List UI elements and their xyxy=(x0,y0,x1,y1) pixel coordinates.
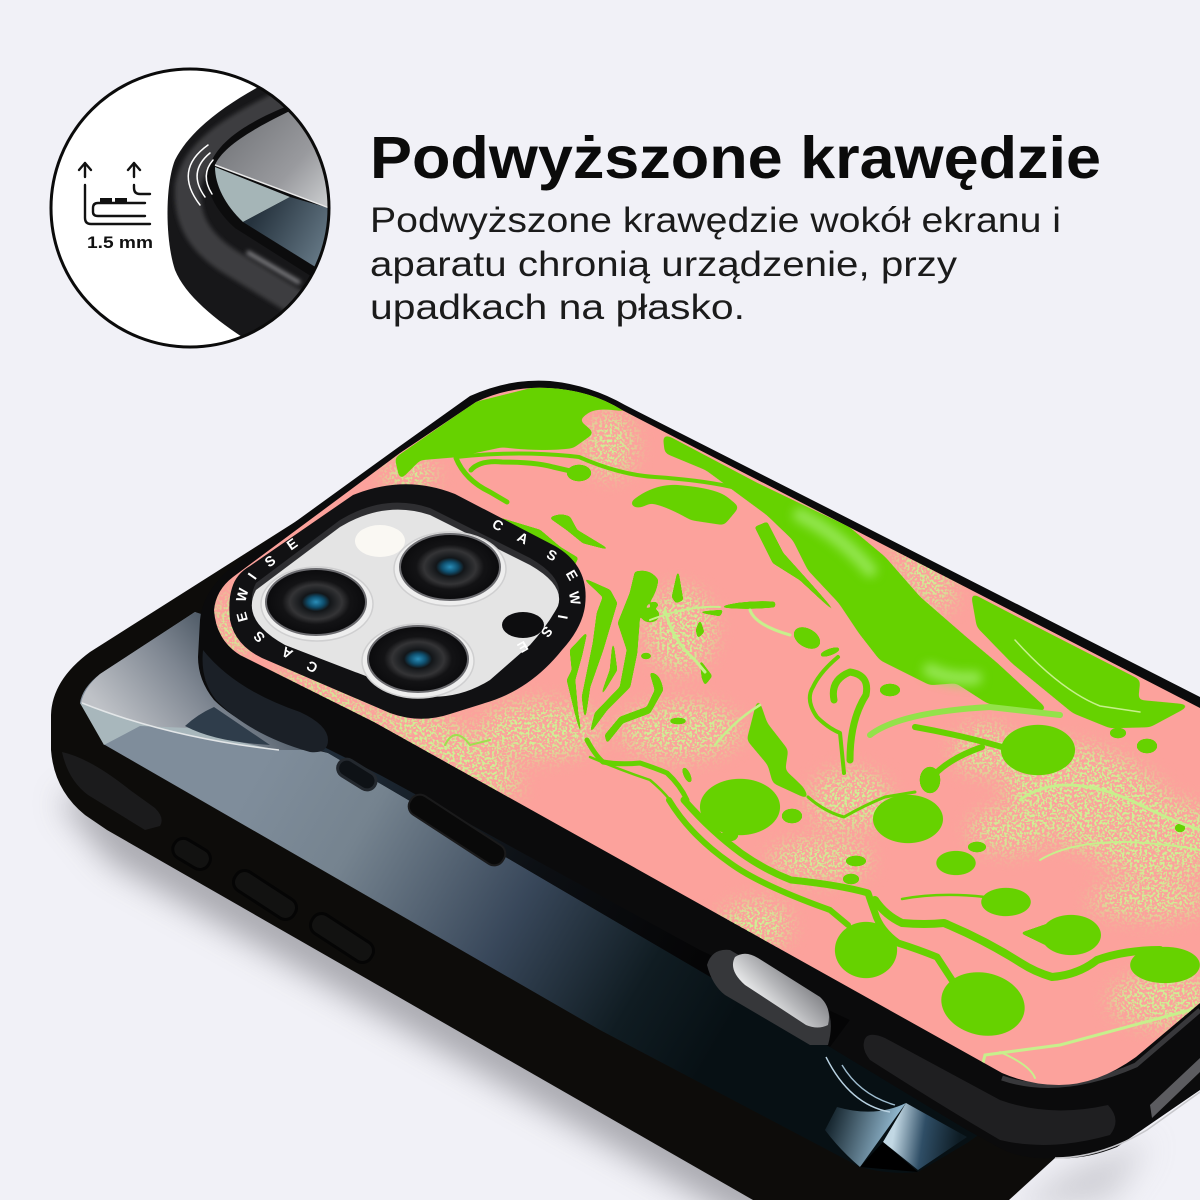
right pool xyxy=(971,593,1191,728)
inner bevel xyxy=(252,503,559,690)
inner sliver xyxy=(602,646,617,692)
pool highlights xyxy=(800,515,975,678)
top left pool xyxy=(395,384,640,480)
back phone lower corner screen glare xyxy=(825,1057,967,1172)
upper middle blob xyxy=(630,485,739,525)
pale green speckled areas xyxy=(213,413,1200,1026)
button: back action xyxy=(169,835,214,873)
green marble streams xyxy=(497,465,1185,947)
bumper frame xyxy=(51,470,1055,1200)
button: volume down xyxy=(307,910,377,966)
green marble large shapes xyxy=(395,384,1200,1043)
stripe near lettering xyxy=(502,518,578,564)
CASEWISE lettering: S xyxy=(250,628,268,646)
tall mid drop xyxy=(747,697,810,800)
case highlight edge xyxy=(1055,1092,1200,1158)
green thin streams xyxy=(456,454,1160,980)
upper left drop xyxy=(551,514,606,549)
diagonal stream xyxy=(756,522,832,608)
drops xyxy=(672,570,683,603)
corner bumper panel xyxy=(203,650,328,752)
camera ring xyxy=(229,484,586,719)
case on top phone xyxy=(198,381,1200,1158)
description text xyxy=(370,201,1061,327)
lens: bottom xyxy=(362,624,474,698)
case glossy rim xyxy=(1002,1010,1200,1086)
CASEWISE lettering xyxy=(233,516,584,676)
left outer stream xyxy=(582,578,617,720)
speaker grille xyxy=(1150,1058,1200,1118)
lidar xyxy=(502,612,544,638)
back phone with raised bumper xyxy=(51,470,1055,1200)
inner opening xyxy=(252,510,559,697)
inset impact arcs xyxy=(188,145,213,205)
CASEWISE lettering: W xyxy=(233,586,252,603)
title: Podwyższone krawędzie xyxy=(370,125,1101,191)
CASEWISE lettering: S xyxy=(544,546,560,564)
screen glass xyxy=(80,612,1000,1173)
CASEWISE lettering: E xyxy=(515,638,531,656)
CASEWISE lettering: C xyxy=(490,516,506,534)
lens: top right xyxy=(394,532,506,606)
blobs xyxy=(700,779,780,835)
phone drop shadow xyxy=(60,790,1000,1200)
camera island xyxy=(229,484,586,719)
marble print xyxy=(200,370,1200,1100)
CASEWISE lettering: I xyxy=(244,570,260,582)
CASEWISE lettering: A xyxy=(515,529,531,547)
CASEWISE lettering: A xyxy=(279,644,295,662)
inset case close-up xyxy=(168,88,328,336)
icon: camera blocks xyxy=(100,198,127,203)
lower screen light area xyxy=(80,703,279,750)
CASEWISE lettering: S xyxy=(262,552,278,570)
raised edge measurement: 1.5 mm xyxy=(87,234,153,252)
lower corner bumper panel xyxy=(864,1035,1116,1145)
flash xyxy=(355,525,405,557)
button: volume up xyxy=(230,867,300,923)
CASEWISE lettering: S xyxy=(538,623,556,641)
icon: raised edge diagram xyxy=(79,163,150,224)
case side wall xyxy=(205,680,850,1047)
CASEWISE lettering: E xyxy=(284,535,300,553)
lens: left xyxy=(261,567,373,641)
silent switch xyxy=(334,756,379,793)
description text: Podwyższone krawędzie wokół ekranu i xyxy=(370,201,1061,240)
long diagonal pool xyxy=(663,435,1048,712)
small leaf xyxy=(720,602,775,608)
side button xyxy=(405,791,509,869)
corner shadow xyxy=(1010,1140,1150,1200)
description text: upadkach na płasko. xyxy=(370,288,745,327)
lower wave stream xyxy=(605,673,663,743)
bumper corner sheen xyxy=(62,752,162,830)
pink base xyxy=(200,370,1200,1100)
screen dark notch xyxy=(185,707,270,745)
CASEWISE lettering: W xyxy=(566,590,584,607)
CASEWISE lettering: C xyxy=(304,658,320,676)
upper screen reflection xyxy=(81,612,330,750)
case body xyxy=(198,381,1200,1158)
description text: aparatu chronią urządzenie, przy xyxy=(370,245,958,284)
inset white disc xyxy=(51,69,329,347)
left tall stream xyxy=(590,571,658,733)
circular detail inset xyxy=(50,68,330,348)
far left stream xyxy=(567,634,586,730)
pale green highlights xyxy=(445,607,1200,1078)
inset circle outline xyxy=(51,69,329,347)
CASEWISE lettering: E xyxy=(563,567,581,583)
CASEWISE lettering: E xyxy=(233,610,251,624)
CASEWISE lettering: I xyxy=(555,614,571,620)
camera control xyxy=(707,950,831,1045)
screen reflection line xyxy=(82,703,279,750)
